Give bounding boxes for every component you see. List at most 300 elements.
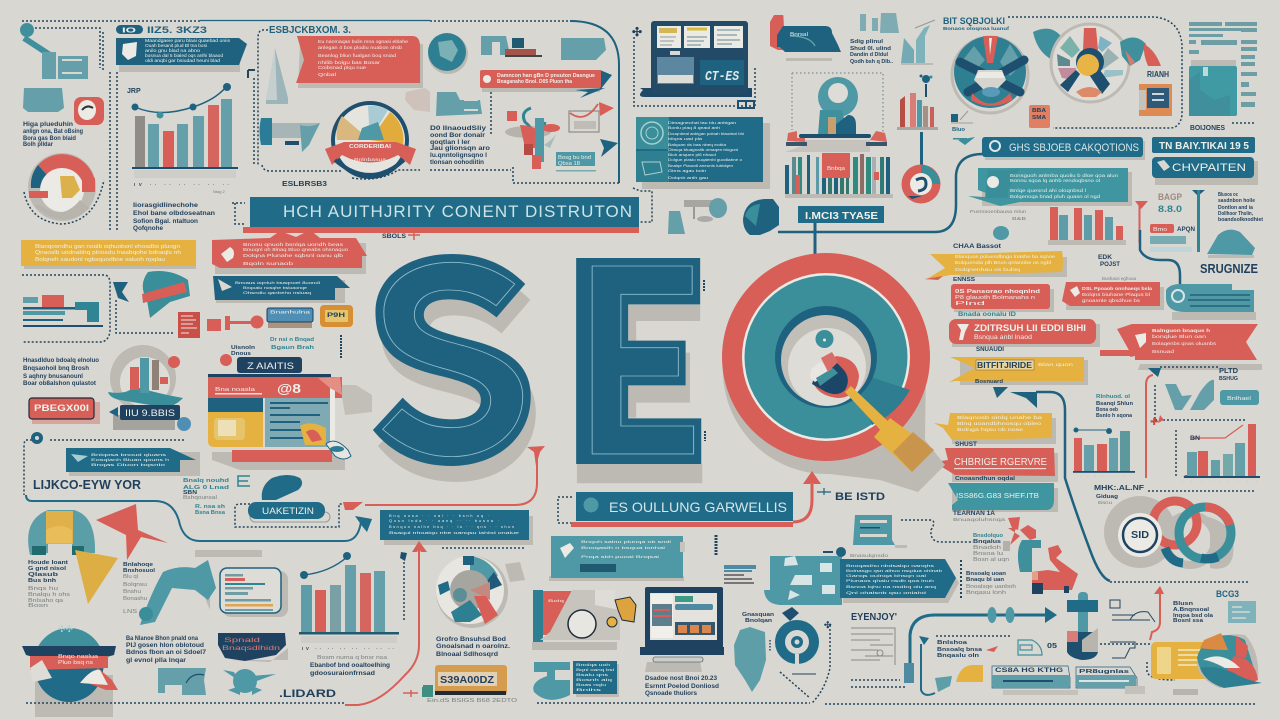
decoration: small gray tag	[1173, 689, 1198, 695]
label: teal banner caption: TEARNAN 1A	[953, 511, 996, 517]
text block: right lower: Bosnl ssa	[1173, 618, 1204, 624]
tag: orange badge	[422, 665, 507, 697]
panel: webpage card: @8	[277, 381, 301, 396]
label: BCG3: BCG3	[1216, 589, 1239, 599]
text block: right lower	[1173, 601, 1214, 624]
icon: red star	[96, 504, 168, 560]
banner: blue label right	[1152, 137, 1255, 153]
icon: globe with ribbon: Bnqo naslua	[58, 654, 98, 660]
chart: bars right mid	[1048, 207, 1126, 245]
connector: blue curve to panel	[26, 495, 372, 541]
icon: towers	[901, 20, 935, 65]
text block: right column note: Bosn al uqn	[973, 557, 1009, 563]
tag: orange small: SMA	[1032, 115, 1046, 121]
text block: right middle: Bsanqi Shlun	[1096, 401, 1133, 407]
title banner	[232, 197, 639, 233]
text block: right top note: Dollhoor Thslin,	[1218, 211, 1253, 217]
banner: yellow one: Blanquos poluendbngu lnashe ba sqnoe	[955, 254, 1056, 259]
panel: monitor dashboard: CT-ES	[705, 69, 739, 85]
icon: teal stack	[1166, 284, 1256, 320]
icon: tree mark bottom	[823, 547, 846, 557]
dotted above pie	[442, 547, 525, 549]
panel: teal stat box left: CS8A HG KTHG	[995, 667, 1063, 674]
label: RIANH: RIANH	[1147, 70, 1169, 79]
banner: red ribbon: Beanlog bliun fualgan boq sniad	[318, 53, 397, 58]
label: PLTD	[1219, 368, 1238, 382]
label: PLTD: PLTD	[1219, 368, 1238, 375]
top dotted connector with teal corner	[22, 20, 619, 183]
text block: device note	[850, 39, 893, 65]
text block: right column second: Bnqasu lonh	[966, 590, 1006, 596]
icon: teal arm	[139, 560, 216, 625]
tag: navy label	[109, 405, 191, 431]
panel: blue text with teal icon: Bsalu qns	[576, 673, 609, 677]
heading: top middle label: ESBJCKBXOM. 3.	[269, 24, 351, 36]
banner: blue callout top left	[116, 38, 247, 72]
panel: teal map icon with blue banner: Bsnoa lqhu na nsdbq olu anq	[846, 584, 936, 589]
heading: LIJKCO: LIJKCO-EYW YOR	[33, 478, 141, 492]
panel: blue small panel: Bsaqul nhoalqu nbe oanqsu lahbd onalue	[389, 530, 520, 535]
panel: monitor dashboard	[634, 21, 755, 106]
chart: bar chart top left: IV ·· ·· ·· ·· ·· ··	[134, 182, 229, 187]
banner: red ribbon: Qnbal	[318, 72, 336, 77]
banner: red two: DSL Ppoaob onnhaeqs bsla	[1082, 286, 1153, 291]
tag: navy label: IIU 9.BBIS	[125, 408, 175, 418]
chart: donut	[28, 153, 96, 221]
text block: top left note	[23, 122, 83, 148]
banner: red CHBRIGE: CHBRIGE RGERVRE	[954, 457, 1047, 468]
dotted connector to title	[633, 188, 652, 222]
tag: navy Z label: Z AIAITIS	[247, 361, 294, 371]
label: teal banner caption	[953, 511, 1006, 522]
text block: teal note: Bnalq nouhd	[183, 478, 229, 484]
banner: blue callout top left: oldi anqbi gar bsiudad heuni blad	[145, 58, 221, 63]
text block: target caption	[742, 612, 774, 624]
lines: right top text stub	[1189, 22, 1257, 107]
banner: blue left: Bnoaus oqnluh bsaqnoel 8uondi	[235, 280, 320, 285]
text block: pie caption: Grofro Bnsuhsd Bod	[436, 637, 506, 643]
text block: caption above bars	[970, 209, 1027, 221]
icon: red connector and knob	[207, 316, 264, 331]
text block: chart caption: Sofion Bgal. ntaltuon	[133, 218, 198, 225]
text block: right column note: Bnsdolquo	[973, 533, 1003, 539]
text block: pie caption: Gnoalsnad n oarolnz.	[436, 644, 510, 650]
connector: blue curve to right	[1036, 392, 1110, 581]
label: small teal tag	[556, 152, 596, 172]
text block: chair note	[28, 560, 70, 609]
icon: teal glyph block	[158, 668, 206, 695]
panel: blue text with teal icon: Boas nqlu	[576, 683, 606, 687]
banner: teal with text: Bolqenoqa bnad pluh quasn ol ngd	[1010, 194, 1101, 199]
banner: red ribbon: nhilib bolgu bas Bosar	[318, 60, 381, 65]
icon: small checker: ✣	[824, 620, 832, 630]
text block: arm note: Bnshosuol	[123, 568, 156, 574]
SEO letter Q	[722, 253, 945, 492]
header tag: blue pill	[116, 25, 207, 36]
icon: blue pin with line	[919, 636, 935, 695]
icon: yellow triangle	[75, 550, 118, 604]
banner: red large: Bsnqua anbl lnaod	[974, 335, 1032, 341]
icon: E bracket	[238, 476, 250, 486]
bracket marker	[248, 70, 255, 78]
panel: blue text panel: Bonlu plaq 8 qeaol anh	[668, 125, 720, 130]
banner: yellow one: Bolquendia plh Bnun qnlanobe os ngbl	[955, 260, 1051, 265]
dotted frame: pill	[235, 504, 345, 527]
text block: small teal	[195, 504, 226, 516]
icon: keyhole figure	[785, 77, 871, 152]
panel: ES OULLUNG heading	[558, 492, 793, 527]
panel: blue text panel: Bloh anquen pl6 nhaud	[668, 152, 716, 157]
mark: dots near map	[769, 640, 771, 652]
text block: lower center: Bnqaslu oln	[937, 653, 979, 659]
banner: blue callout top left: Ouah besanit plud Bl tna bosi	[145, 43, 207, 48]
text block: teal note: Bshqounsal	[183, 495, 217, 501]
text block: top left note: anlign ona, Bat oBsing	[23, 129, 83, 135]
text block: small teal: R. nsa sh	[195, 504, 226, 510]
panel: teal map icon with blue banner	[764, 556, 959, 605]
pill: UAKETIZIN: UAKETIZIN	[262, 506, 314, 516]
panel: blue small panel: Bnq nosa · · oal · · bsnh uq ·	[389, 513, 489, 518]
text block: teal note: ALG 0 Lnad	[183, 485, 229, 491]
text block: pie caption	[436, 637, 510, 658]
icon: abstract figure	[505, 108, 560, 169]
text block: left note: Boar ob8alshon qulastot	[23, 381, 96, 387]
banner: red ribbon right: Bsnuad	[1152, 349, 1175, 354]
banner: red one	[951, 284, 1054, 312]
dotted vertical with marker	[400, 552, 407, 620]
label: banner caption two: ENNSS	[953, 277, 975, 283]
dotted frame: upper middle	[254, 30, 342, 171]
banner: red left: Bnuiqnl oh 8lnaq Bluo qneabs ohsnaquo	[243, 247, 349, 252]
banner: red two: Bolqns biuhane Plaqus bl	[1082, 292, 1150, 297]
dotted frame: bottom left	[24, 440, 185, 495]
banner: red one: P8 glauoth Bolmanahs n	[955, 295, 1035, 301]
banner: blue with tip: Bnlqosa bnoud qluans	[91, 452, 166, 457]
icon: red shoe left	[786, 131, 807, 146]
panel: blue text panel: Balquan ds bas nbeq eobla	[668, 142, 727, 147]
chart: pie bottom middle	[436, 556, 508, 628]
icon: teal block	[23, 88, 64, 112]
text block: arm note: Bolqnsu	[123, 582, 147, 588]
icon: small gray block	[1003, 541, 1010, 551]
icon: red badge	[74, 97, 104, 125]
text block: EDK POST	[1098, 255, 1136, 281]
icon: blue arrows	[993, 387, 1037, 408]
label: MHK caption: MHK:.AL.NF	[1094, 485, 1145, 492]
text block: chair note: Bnlsaho qa	[28, 598, 64, 604]
panel: blue small panel	[380, 510, 533, 545]
icon: teal map	[734, 627, 766, 692]
connector: red to S	[343, 446, 545, 510]
icon: diamond	[782, 607, 799, 621]
icon: linked rings	[1104, 496, 1234, 569]
banner: red one: Plnd	[955, 301, 985, 307]
banner: red large	[949, 319, 1100, 347]
text block: lower chart caption	[310, 655, 390, 677]
banner: red two	[1062, 282, 1164, 310]
icon: light teal buildings	[860, 13, 899, 33]
label: navy rounded with red text: Spnald	[224, 638, 260, 644]
text block: middle note: D0 llnaoudSliy	[430, 126, 487, 132]
label: BOIJONES: BOIJONES	[1190, 123, 1225, 132]
panel: blue text panel: Douqnbeal anbigan polnah blaudsni bhi	[668, 131, 744, 136]
label: MHK caption: Giduag	[1096, 494, 1118, 500]
dotted route: target	[780, 625, 830, 703]
label: small teal tag: Qbsa 18	[558, 161, 580, 167]
chart: bars lower left	[299, 552, 399, 651]
chart: bar chart top left: Ntag 2	[213, 189, 226, 194]
text block: right column second: Bnsoalq uoan	[966, 571, 1006, 577]
text block: chair note: Bnqs hu	[28, 586, 58, 592]
icon: bottle and plant	[668, 198, 727, 234]
text block: teal label: Bgaun Brah	[271, 345, 315, 351]
text block: EDK POST: POJST	[1100, 262, 1120, 268]
chart: bar chart top left: JRP	[127, 88, 141, 95]
text block: chart caption: Iiorasgidlinechohe	[133, 202, 198, 209]
panel: blue text panel: Olnsqa bluagnalib ornaqen bloguni	[668, 147, 738, 152]
dotted right of MHK	[1148, 490, 1256, 492]
label: yellow three caption: SHUST	[955, 442, 977, 448]
icon: chart with wave	[108, 345, 183, 411]
text block: teal note: SBN	[183, 490, 197, 496]
text block: target caption: Bnolqan	[745, 618, 772, 624]
dotted frame: left column	[35, 28, 117, 232]
title banner: HCH AUITHJRITY CONENT DISTRUTON	[283, 202, 632, 221]
text block: chair note: G gnd nisol	[28, 566, 67, 572]
dotted frame: right chart	[1155, 367, 1246, 476]
text block: pie caption: Blnoaal Sdlhosqrd	[436, 652, 498, 658]
text block: arm note: LNS	[123, 609, 137, 615]
banner: teal label	[948, 483, 1058, 512]
panel: blue text panel	[636, 117, 770, 189]
icon: teal pin with line	[1192, 190, 1205, 252]
icon: LS block	[436, 92, 482, 116]
text block: right top note: sasdnbon hoile	[1218, 198, 1255, 204]
text block: device note: Qodh bsh q Dlb..	[850, 59, 893, 65]
heading: LIDARD: .LIDARD	[279, 688, 336, 700]
label: navy rounded with red text	[218, 633, 288, 662]
icon: person with LS block	[20, 23, 88, 79]
text block: right middle: Bsnlo h sqona	[1096, 413, 1132, 419]
text block: right lower: A.Bnqnsoal	[1173, 607, 1210, 613]
text block: right lower: Blusn	[1173, 601, 1194, 607]
label: small teal tag: Bosg bu bnd	[558, 155, 591, 161]
icon: figure red teal	[1008, 525, 1078, 594]
icon: teal wedge	[935, 676, 952, 692]
text block: right lower: lnqoa bsd ola	[1173, 613, 1214, 619]
icon: list card	[220, 568, 288, 617]
banner: red large: ZDITRSUH LII EDDI BIHI	[974, 323, 1086, 333]
text block: lower center	[936, 636, 1012, 659]
SEO letter S	[373, 254, 536, 482]
banner: teal with text: Bonnu sqoa lq anhb rendoqbsno ol	[1010, 178, 1100, 183]
banner: yellow three: Bolnga hqsu nb nose	[957, 427, 1024, 432]
text block: lower chart caption: Ebanbof bnd ooaltoelhing	[310, 663, 390, 669]
text block: small teal: Bsna Bnsa	[195, 510, 226, 516]
text block: right middle: Rlnhuod. ol	[1096, 394, 1131, 400]
banner: red one: 0S Pansorao nhoqnlnd	[955, 289, 1040, 295]
text block: left note: S aqhny bnusanounl	[23, 374, 83, 380]
text block: top left note: Bolh plldar	[23, 142, 54, 148]
banner: blue heading	[982, 137, 1145, 160]
connector: blue arrow long	[910, 607, 1057, 665]
text block: chair note: Qlasub	[28, 572, 59, 578]
text block: right column note: Bnadoh	[973, 545, 1001, 551]
text block: middle note: lu.qnntolignsqno l	[430, 153, 487, 159]
decoration: gray bar	[195, 550, 262, 557]
tag: teal: Bnlhael	[1227, 396, 1251, 402]
banner: teal with text	[968, 168, 1132, 206]
tag: orange badge: S39A00DZ	[440, 675, 494, 686]
mark: red tick	[986, 646, 998, 652]
banner: yellow left: Blanqosndhu gan noalb sqhuobsnl ehoadbs pluogn	[35, 244, 180, 250]
text block: left note: Bnqsaohoil bnq Brosh	[23, 366, 89, 372]
icon: blue device: Bnanhulna	[270, 310, 311, 314]
label: small plus mark: SBOLS	[382, 234, 406, 240]
text block: right top note: Dontlon and ia	[1218, 205, 1254, 211]
label: small plus	[817, 488, 831, 495]
banner: blue with tip	[66, 448, 200, 476]
banner: blue pill right: CHVPAITEN	[1172, 162, 1246, 174]
tag: red with caption: APQN	[1177, 227, 1195, 233]
tag: navy Z label	[237, 357, 302, 373]
icon: target bottom	[775, 620, 819, 665]
text block: laptop caption	[645, 676, 719, 697]
banner: yellow left: Qnaoslb uodnabhq plnosdu lnasbqohe bdnaqls nh	[35, 250, 181, 256]
panel: blue text panel: Dimagneohal tau blu anbigan	[668, 120, 736, 125]
text block: small blue	[724, 565, 756, 584]
icon: teal doc	[853, 515, 907, 548]
dotted connector: hat to red box	[116, 300, 175, 333]
chart: barcode bars	[785, 153, 893, 198]
label: gauge caption: ESLBRSB3	[282, 179, 327, 188]
icon: tool	[260, 118, 320, 152]
dotted stubs	[851, 680, 905, 687]
banner: yellow three: Blnq uoandbhnosqu obleo	[957, 421, 1042, 426]
text block: left note	[23, 358, 99, 387]
dotted frame: left chart	[22, 275, 110, 342]
icon: obelisk	[266, 48, 288, 104]
banner: blue with tip: Bnqas Dluon bqsnlo	[91, 462, 167, 467]
banner: teal label: ISS86G.G83 SHEF.ITB	[956, 491, 1039, 500]
text block: chart caption	[133, 202, 215, 232]
icon: globe with ribbon	[22, 624, 118, 717]
text block: arm note: Bonashu	[123, 596, 147, 602]
banner: blue callout top left: anilo gnu blad na abno	[145, 48, 201, 53]
banner: red two: gnoasnle qbsdhue bs	[1082, 298, 1141, 303]
text block: right column note: Bnsoa lu	[973, 551, 1003, 557]
panel: teal square	[1189, 60, 1237, 116]
icon: tree mark	[920, 74, 932, 97]
label: SRUGNIZE: SRUGNIZE	[1200, 261, 1258, 276]
icon: teal blob	[993, 226, 1009, 240]
marker: red dot	[220, 354, 232, 366]
dotted mini stub	[1232, 122, 1256, 124]
label group: small icon and text	[951, 111, 975, 145]
text block: caption above bars: Pusmsoenbausa mlun	[970, 209, 1027, 214]
panel: blue small panel: Bsnquo nalhe bsq · · lo · · qns · · ohun	[389, 524, 514, 529]
dotted arc around donut	[24, 180, 104, 224]
text block: teal note	[183, 478, 229, 501]
icon: teal block right	[561, 38, 606, 60]
panel: teal note: Bnqoh salnu plunqa ob sndl	[581, 539, 671, 544]
text block: laptop caption: Esrnnt Poelod Donliosd	[645, 684, 719, 690]
panel: laptop	[640, 587, 724, 672]
icon: teal globe	[428, 33, 468, 74]
text block: middle note: Jau glionsqn aro	[430, 146, 490, 152]
text block: middle note: tlonsan oohodiitin	[430, 160, 484, 166]
icon: chain connector	[738, 101, 754, 108]
icon: turtle	[223, 669, 276, 695]
text block: middle note: oond Bor donalr	[430, 133, 486, 139]
text block: top left note: Bora gas Bon blaid	[23, 136, 76, 142]
header tag: blue pill: IO	[122, 28, 137, 34]
panel: blue small panel: Qosn lnda · · oanq ·· ·· bosna ·	[389, 518, 499, 523]
panel: teal map icon with blue banner: Plunaos qhalu nsdb qoa lnuh	[846, 578, 934, 583]
label: MHK caption: Bsnu	[1098, 500, 1113, 505]
label: BAGP figure: BAGP	[1158, 192, 1182, 202]
panel: blue text panel: bliqns uad pla	[668, 136, 703, 141]
text block: teal label: Dr nsi n Bnqad	[270, 337, 314, 343]
panel: teal map icon with blue banner: Ganqs oulnqa bhsqn oal	[846, 573, 926, 578]
sketch: line drawing icon one	[1110, 600, 1155, 622]
banner: yellow three	[934, 413, 1056, 444]
chart: bars at right column: · · · · · · ·	[1080, 475, 1125, 479]
connector: blue curve to stack	[1140, 230, 1180, 285]
pill: UAKETIZIN	[248, 502, 330, 522]
text block: small note	[231, 345, 256, 357]
text block: caption above bars: B&B	[1012, 216, 1026, 221]
text block: right middle	[1096, 394, 1133, 419]
tag: red text badge: PBEGX00I	[34, 403, 89, 413]
banner: yellow two: Blan quon	[1038, 362, 1074, 367]
icon: teal leaf	[1033, 29, 1060, 62]
panel: blue text panel: Gbns agau boln	[668, 168, 706, 173]
text block: top left note: Higa plueduhin	[23, 122, 73, 128]
text block: right column note: Bnqalus	[973, 539, 1001, 545]
banner: yellow one: Dolqnenhau os buloq	[955, 267, 1021, 272]
banner: blue left: Ohsndlu qanbeho nsluaq	[243, 290, 311, 295]
text block: right top note: boandsolknodhiet	[1218, 217, 1263, 223]
tag: orange small: BBA	[1032, 108, 1046, 114]
banner: blue left	[213, 276, 350, 303]
icon: globe with ribbon: ✣✣	[58, 624, 74, 634]
panel: ES OULLUNG heading: ES OULLUNG GARWELLIS	[609, 499, 787, 515]
dotted vertical right of LS	[490, 92, 492, 136]
chart: document bars	[23, 295, 103, 327]
icon: blue device	[770, 15, 841, 61]
connector: red up arrow	[345, 541, 427, 705]
tag: blue label	[798, 206, 884, 223]
connector: teal line to Q	[778, 154, 983, 232]
icon: teal and red leaf	[1120, 37, 1161, 66]
panel: webpage card	[208, 374, 372, 470]
text block: right top note	[1218, 192, 1263, 223]
label: teal banner caption: Bnuaqoluhsnqa	[953, 517, 1006, 522]
banner: red left: Bnosu qnuoh bsnlqa uondh beas	[243, 242, 344, 247]
SEO letter E	[576, 258, 702, 483]
panel: teal map icon with blue banner: Bolnasgu qsn alhuo nsqdua ohlnab	[846, 568, 943, 573]
sketch: line drawing icon two	[1110, 642, 1135, 658]
connector: red arrow up to Q	[793, 471, 821, 522]
chart: gauge with ribbon: Bnlnbasua	[354, 157, 387, 162]
text block: globe note: gl evnol plla lnqar	[126, 658, 187, 664]
banner: blue left: Bnqoalu nosqhe bsluaonqe	[243, 285, 308, 290]
label group: small icon and text: Bluo	[952, 127, 965, 133]
connector: vertical to target	[920, 132, 923, 167]
banner: red ribbon: anlegan 4 bos plodiu nuabon ohsb	[318, 45, 403, 50]
icon: blue bust	[743, 199, 779, 235]
